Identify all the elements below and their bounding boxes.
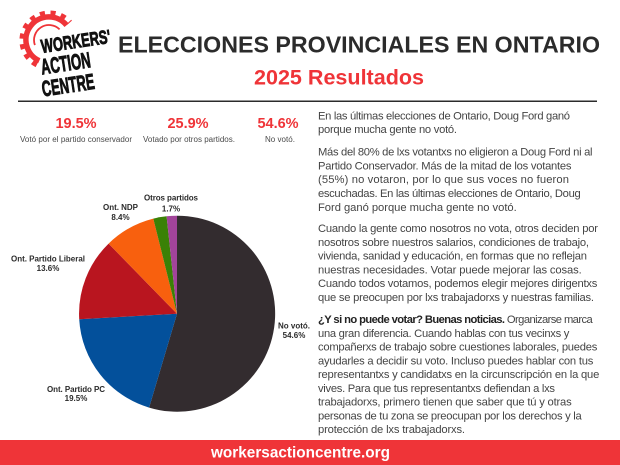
text block: if you cannot vote: compañerxs de trabajo sobre cuestiones laborales, puedes <box>318 342 598 354</box>
slice: Ont. Partido Liberal <box>79 244 177 319</box>
text block: if you cannot vote: personas de tu zona se preocupan por los derechos y la <box>318 410 582 422</box>
title: ELECCIONES PROVINCIALES EN ONTARIO <box>118 32 600 58</box>
icon: red gear <box>22 13 70 64</box>
slice: green party <box>153 216 177 314</box>
text block: if you cannot vote: trabajadorxs, primero tienen que saber que tú y otras <box>318 396 572 408</box>
slice: Otros partidos <box>167 216 177 314</box>
text block: 80 percent: escuchadas. En las últimas elecciones de Ontario, Doug <box>318 188 581 200</box>
text block: intro: porque mucha gente no votó. <box>318 124 457 136</box>
stat: conservative vote: 19.5% <box>55 116 97 132</box>
footer URL: workersactioncentre.org <box>210 444 390 462</box>
label: No votó: No votó. <box>278 322 310 330</box>
text block: if you cannot vote: protección de lxs trabajadorxs. <box>318 424 465 436</box>
slice: No votó <box>149 216 275 412</box>
label: No votó: 54.6% <box>283 331 305 340</box>
text block: when people do not vote: nuestras necesidades. Votar puede mejorar las cosas. <box>318 264 582 276</box>
text block: 80 percent: (55%) no votaron, por lo que sus voces no fueron <box>318 174 569 186</box>
stat: other parties: Votado por otros partidos. <box>143 135 235 144</box>
text block: when people do not vote: nosotros sobre nuestros salarios, condiciones de trabajo, <box>318 237 589 249</box>
text block: 80 percent: Más del 80% de lxs votantxs no eligieron a Doug Ford ni al <box>318 146 592 158</box>
text block: if you cannot vote: vives. Para que tus representantxs defiendan a lxs <box>318 383 555 395</box>
stat: did not vote: No votó. <box>265 135 295 144</box>
text block: if you cannot vote: una gran diferencia. Cuando hablas con tus vecinxs y <box>318 328 570 340</box>
stat: conservative vote: Votó por el partido conservador <box>20 135 132 144</box>
stat: did not vote: 54.6% <box>257 116 299 132</box>
label: Ont. Partido PC: 19.5% <box>65 394 87 403</box>
text block: when people do not vote <box>318 223 598 304</box>
label: Ont. Partido Liberal: 13.6% <box>37 264 59 273</box>
text block: 80 percent: Ford ganó porque mucha gente no votó. <box>318 202 517 214</box>
label: Ont. Partido PC <box>47 385 105 403</box>
label: Otros partidos <box>144 194 199 214</box>
text block: intro: En las últimas elecciones de Ontario, Doug Ford ganó <box>318 110 570 122</box>
text block: if you cannot vote: ¿Y si no puede votar? Buenas noticias. Organizarse marca <box>318 314 593 326</box>
slice: Ont. Partido PC <box>79 314 177 408</box>
footer band <box>0 440 620 465</box>
label: Ont. Partido PC: Ont. Partido PC <box>47 385 105 394</box>
stat: conservative vote <box>20 116 132 144</box>
text block: when people do not vote: Cuando la gente como nosotros no vota, otros deciden por <box>318 223 598 235</box>
label: Ont. Partido Liberal: Ont. Partido Liberal <box>11 254 85 264</box>
label: Ont. NDP: Ont. NDP <box>103 203 139 212</box>
text block: intro <box>318 110 570 136</box>
stat: other parties: 25.9% <box>167 116 209 132</box>
text block: if you cannot vote: ayudarles a decidir su voto. Incluso puedes hablar con tus <box>318 355 594 367</box>
slice: Ont. NDP <box>109 219 177 314</box>
subtitle: 2025 Resultados <box>254 66 424 90</box>
label: No votó <box>278 322 310 340</box>
label: Ont. NDP: 8.4% <box>111 213 130 222</box>
logo: Workers' Action Centre <box>22 13 112 101</box>
label: Ont. Partido Liberal <box>11 254 85 273</box>
text block: if you cannot vote: representantxs y candidatxs en la circunscripción en la que <box>318 369 599 381</box>
text block: 80 percent <box>318 146 592 214</box>
text block: when people do not vote: que se preocupen por lxs trabajadorxs y nuestras familias. <box>318 292 594 304</box>
pie labels <box>11 194 310 403</box>
label: Otros partidos: Otros partidos <box>144 194 199 202</box>
text block: when people do not vote: vivienda, sanidad y educación, en formas que no reflejan <box>318 250 587 262</box>
logo wordmark: WORKERS' <box>40 27 112 58</box>
logo wordmark <box>39 27 112 101</box>
stat: other parties <box>143 116 235 144</box>
text block: if you cannot vote <box>318 314 599 436</box>
text block: when people do not vote: Cuando todos votamos, podemos elegir mejores dirigentxs <box>318 278 598 290</box>
logo wordmark: CENTRE <box>40 69 96 101</box>
label: Otros partidos: 1.7% <box>162 204 180 214</box>
stat: did not vote <box>257 116 299 144</box>
pie chart <box>79 216 275 412</box>
logo wordmark: ACTION <box>39 47 92 79</box>
label: Ont. NDP <box>103 203 139 222</box>
text block: 80 percent: Partido Conservador. Más de la mitad de los votantes <box>318 160 572 172</box>
